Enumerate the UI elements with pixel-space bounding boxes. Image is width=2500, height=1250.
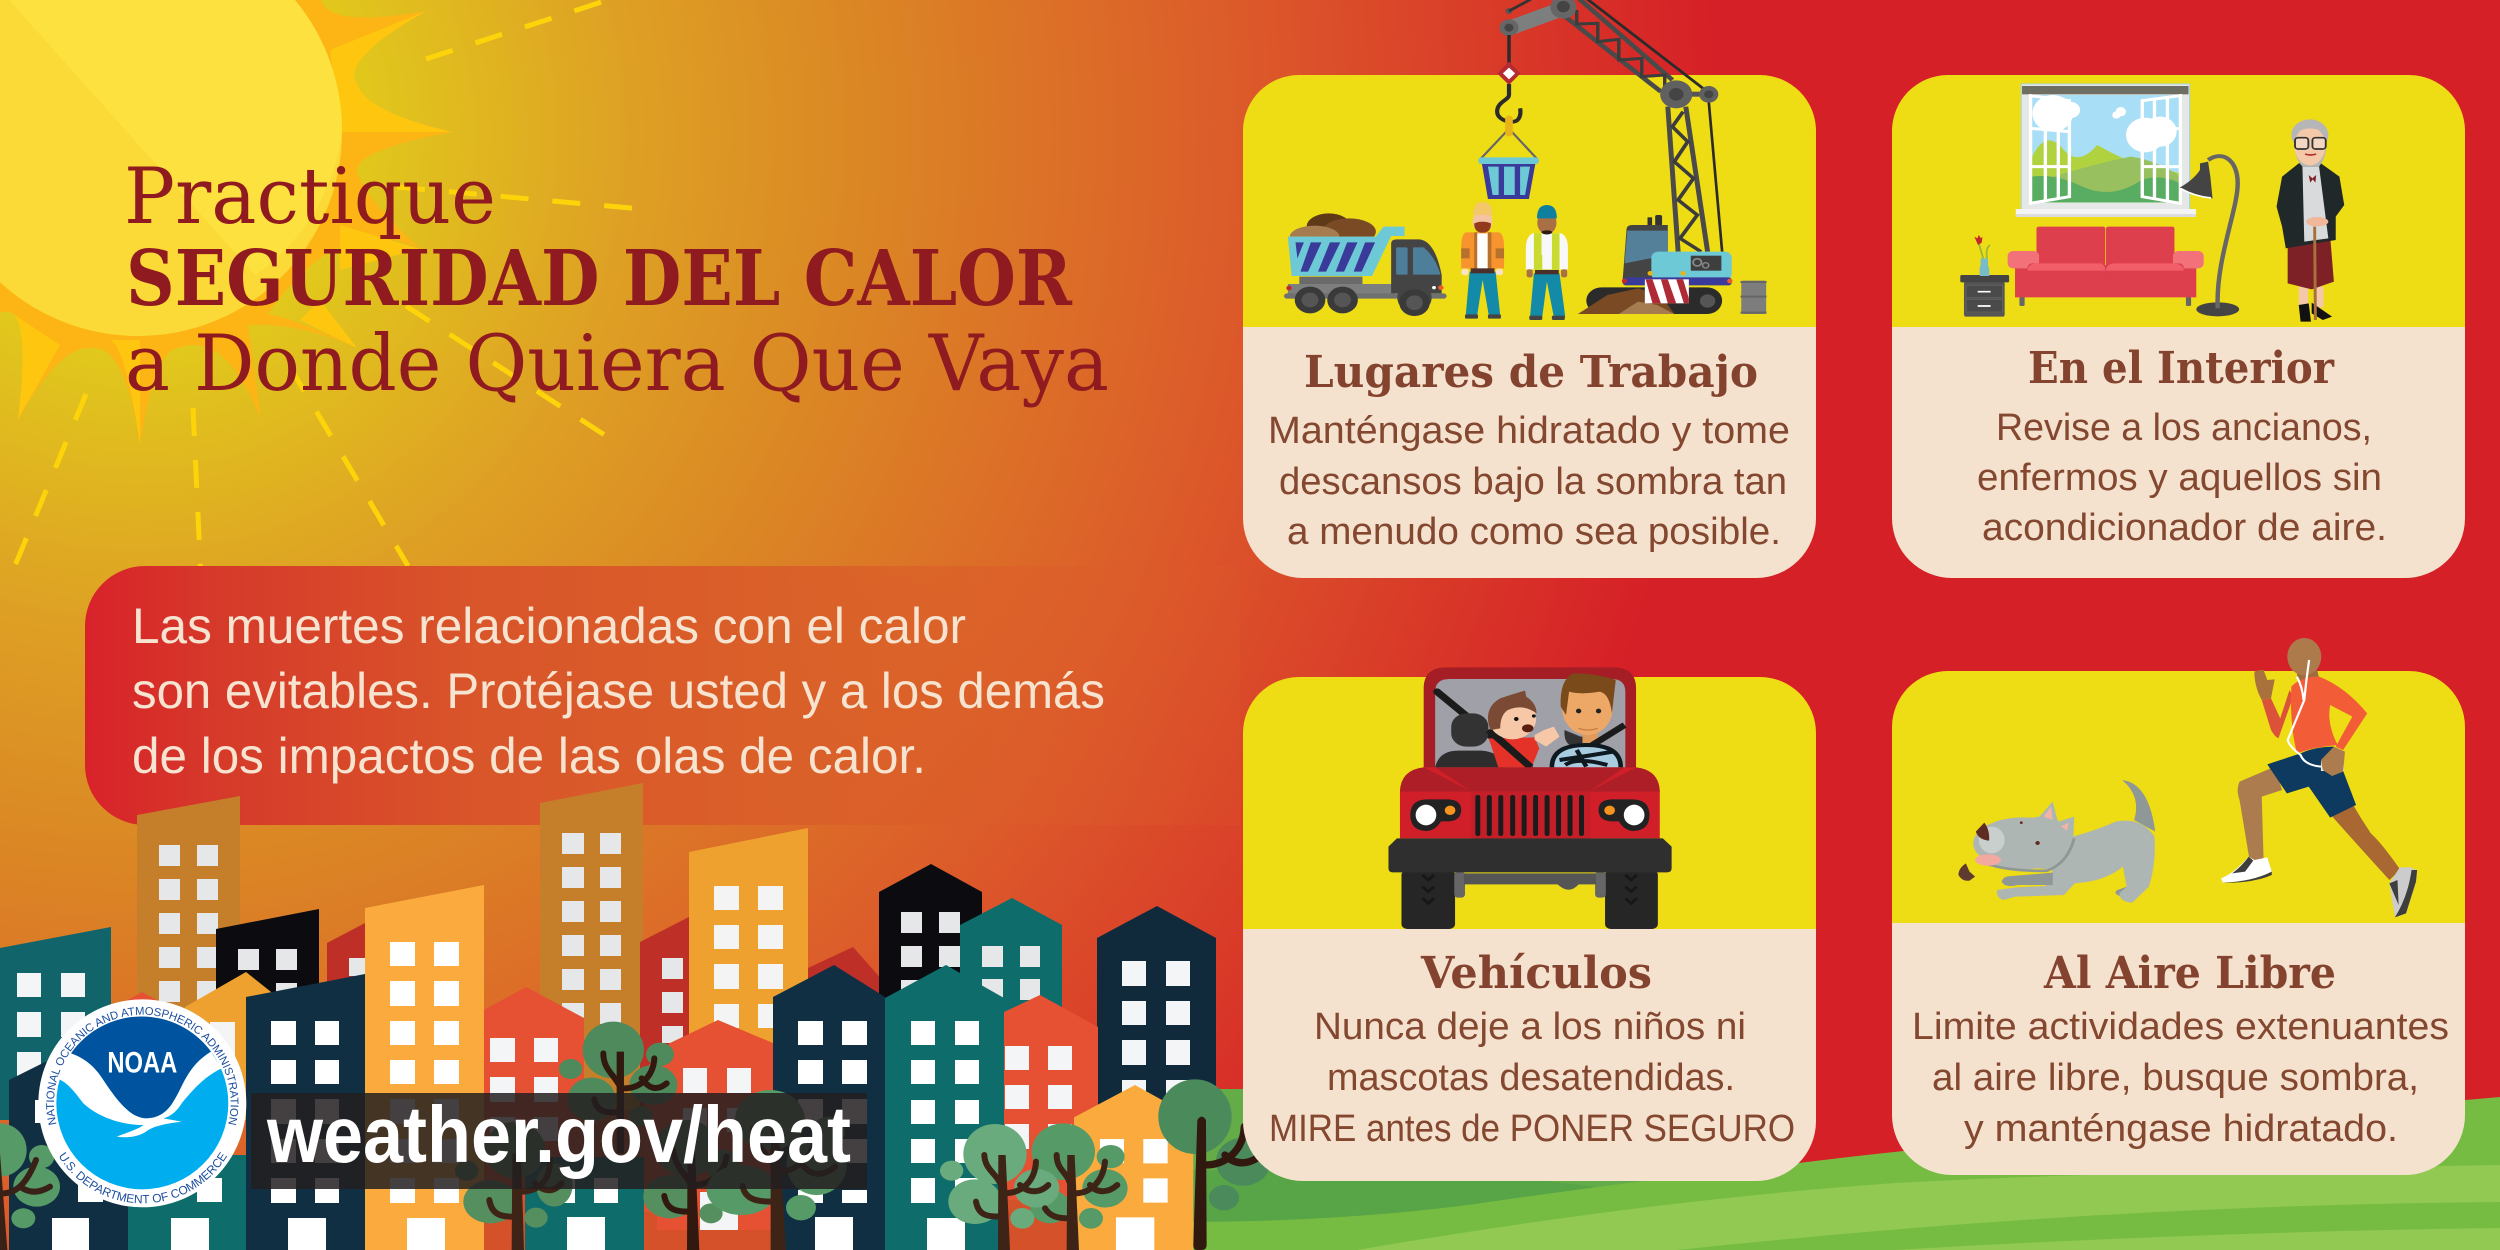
window bbox=[2016, 84, 2196, 217]
crane bbox=[1497, 0, 1732, 314]
title: Practique bbox=[124, 152, 496, 242]
lower-left buildings bbox=[9, 1062, 247, 1250]
title: SEGURIDAD DEL CALOR bbox=[126, 234, 1073, 324]
hanging basket bbox=[1478, 116, 1539, 199]
tree: left bbox=[0, 1123, 60, 1250]
side table with vase bbox=[1960, 235, 2009, 317]
small red and amber houses bbox=[110, 972, 290, 1120]
navy tower bbox=[246, 974, 365, 1250]
red right house bbox=[1004, 995, 1098, 1250]
icon: NOAA logo: U.S. DEPARTMENT OF COMMERCE bbox=[60, 1152, 228, 1204]
body text: Limite actividades extenuantes bbox=[1912, 1006, 2449, 1048]
teal mid building bbox=[525, 1157, 644, 1250]
sofa bbox=[2008, 227, 2204, 306]
floor lamp bbox=[2180, 156, 2239, 316]
teal left tower bbox=[0, 927, 111, 1120]
body text: Revise a los ancianos, bbox=[1996, 407, 2372, 449]
body text: descansos bajo la sombra tan bbox=[1279, 461, 1787, 503]
child passenger bbox=[1488, 691, 1560, 767]
trees: right cluster bbox=[940, 1079, 1271, 1250]
grass hills bbox=[1180, 1089, 2500, 1250]
callout text: Las muertes relacionadas con el calor bbox=[132, 598, 966, 654]
illustration: construction site bbox=[1284, 0, 1767, 320]
red mid house bbox=[644, 1020, 773, 1250]
navy right wing bbox=[1098, 1100, 1216, 1250]
callout text: de los impactos de las olas de calor. bbox=[132, 728, 926, 784]
back red buildings bbox=[327, 917, 900, 1110]
heading: Lugares de Trabajo bbox=[1304, 347, 1758, 398]
icon: NOAA logo: NOAA bbox=[107, 1047, 177, 1080]
heading: Vehículos bbox=[1420, 948, 1652, 999]
jeep body bbox=[1388, 767, 1672, 929]
jeep cabin bbox=[1424, 667, 1636, 770]
heading: Al Aire Libre bbox=[2043, 948, 2336, 999]
worker: yellow vest bbox=[1526, 205, 1568, 320]
black tower bbox=[216, 909, 319, 1050]
elderly woman with cane bbox=[2277, 119, 2344, 322]
title bbox=[124, 152, 1109, 409]
back ochre buildings bbox=[137, 783, 643, 1110]
icon: NOAA logo: NATIONAL OCEANIC AND ATMOSPHERIC ADMINISTRATION bbox=[46, 1006, 238, 1125]
dashed sun rays bbox=[7, 0, 653, 585]
dump truck bbox=[1284, 213, 1447, 316]
title: a Donde Quiera Que Vaya bbox=[125, 319, 1109, 409]
black house bbox=[879, 864, 982, 1100]
red house bbox=[484, 987, 584, 1250]
callout text bbox=[132, 598, 1105, 784]
amber front house bbox=[1074, 1085, 1193, 1250]
worker: orange jacket bbox=[1461, 202, 1504, 319]
body text: y manténgase hidratado. bbox=[1964, 1108, 2398, 1150]
tree: center cluster bbox=[455, 1022, 847, 1250]
barrel bbox=[1741, 281, 1767, 314]
teal house bbox=[885, 965, 1004, 1250]
runner bbox=[2221, 638, 2417, 917]
city skyline bbox=[0, 783, 1216, 1250]
body text bbox=[1912, 1006, 2449, 1150]
callout panel background bbox=[85, 566, 1240, 825]
teal back house bbox=[960, 898, 1062, 1100]
icon: sun bbox=[0, 0, 452, 444]
body text: mascotas desatendidas. bbox=[1327, 1057, 1735, 1099]
body text: MIRE antes de PONER SEGURO bbox=[1269, 1108, 1795, 1150]
body text: Nunca deje a los niños ni bbox=[1314, 1006, 1746, 1048]
driver bbox=[1552, 673, 1625, 767]
panel: Al Aire Libre bbox=[1892, 638, 2465, 1175]
illustration: dog and runner bbox=[1958, 638, 2417, 917]
body text bbox=[1977, 407, 2387, 549]
body text: enfermos y aquellos sin bbox=[1977, 457, 2382, 499]
illustration: jeep with driver and child bbox=[1388, 667, 1672, 929]
body text: a menudo como sea posible. bbox=[1287, 511, 1781, 553]
dirt pile and barrier bbox=[1578, 279, 1689, 314]
body text bbox=[1269, 1006, 1795, 1150]
callout text: son evitables. Protéjase usted y a los demás bbox=[132, 663, 1105, 719]
icon: NOAA logo bbox=[38, 999, 246, 1208]
navy house bbox=[773, 965, 885, 1250]
dog bbox=[1958, 780, 2155, 903]
body text: Manténgase hidratado y tome bbox=[1268, 410, 1790, 452]
navy back house bbox=[1097, 906, 1216, 1130]
panel: En el Interior bbox=[1892, 75, 2465, 578]
heading: En el Interior bbox=[2028, 343, 2335, 394]
web address bar: weather.gov/heat bbox=[266, 1090, 851, 1179]
illustration: living room bbox=[1960, 84, 2344, 322]
panel: Vehículos bbox=[1243, 667, 1816, 1181]
panel: Lugares de Trabajo bbox=[1243, 0, 1816, 578]
orange tower bbox=[365, 885, 484, 1250]
amber tower bbox=[689, 828, 808, 1100]
body text: acondicionador de aire. bbox=[1982, 507, 2387, 549]
body text bbox=[1268, 410, 1790, 553]
body text: al aire libre, busque sombra, bbox=[1932, 1057, 2419, 1099]
